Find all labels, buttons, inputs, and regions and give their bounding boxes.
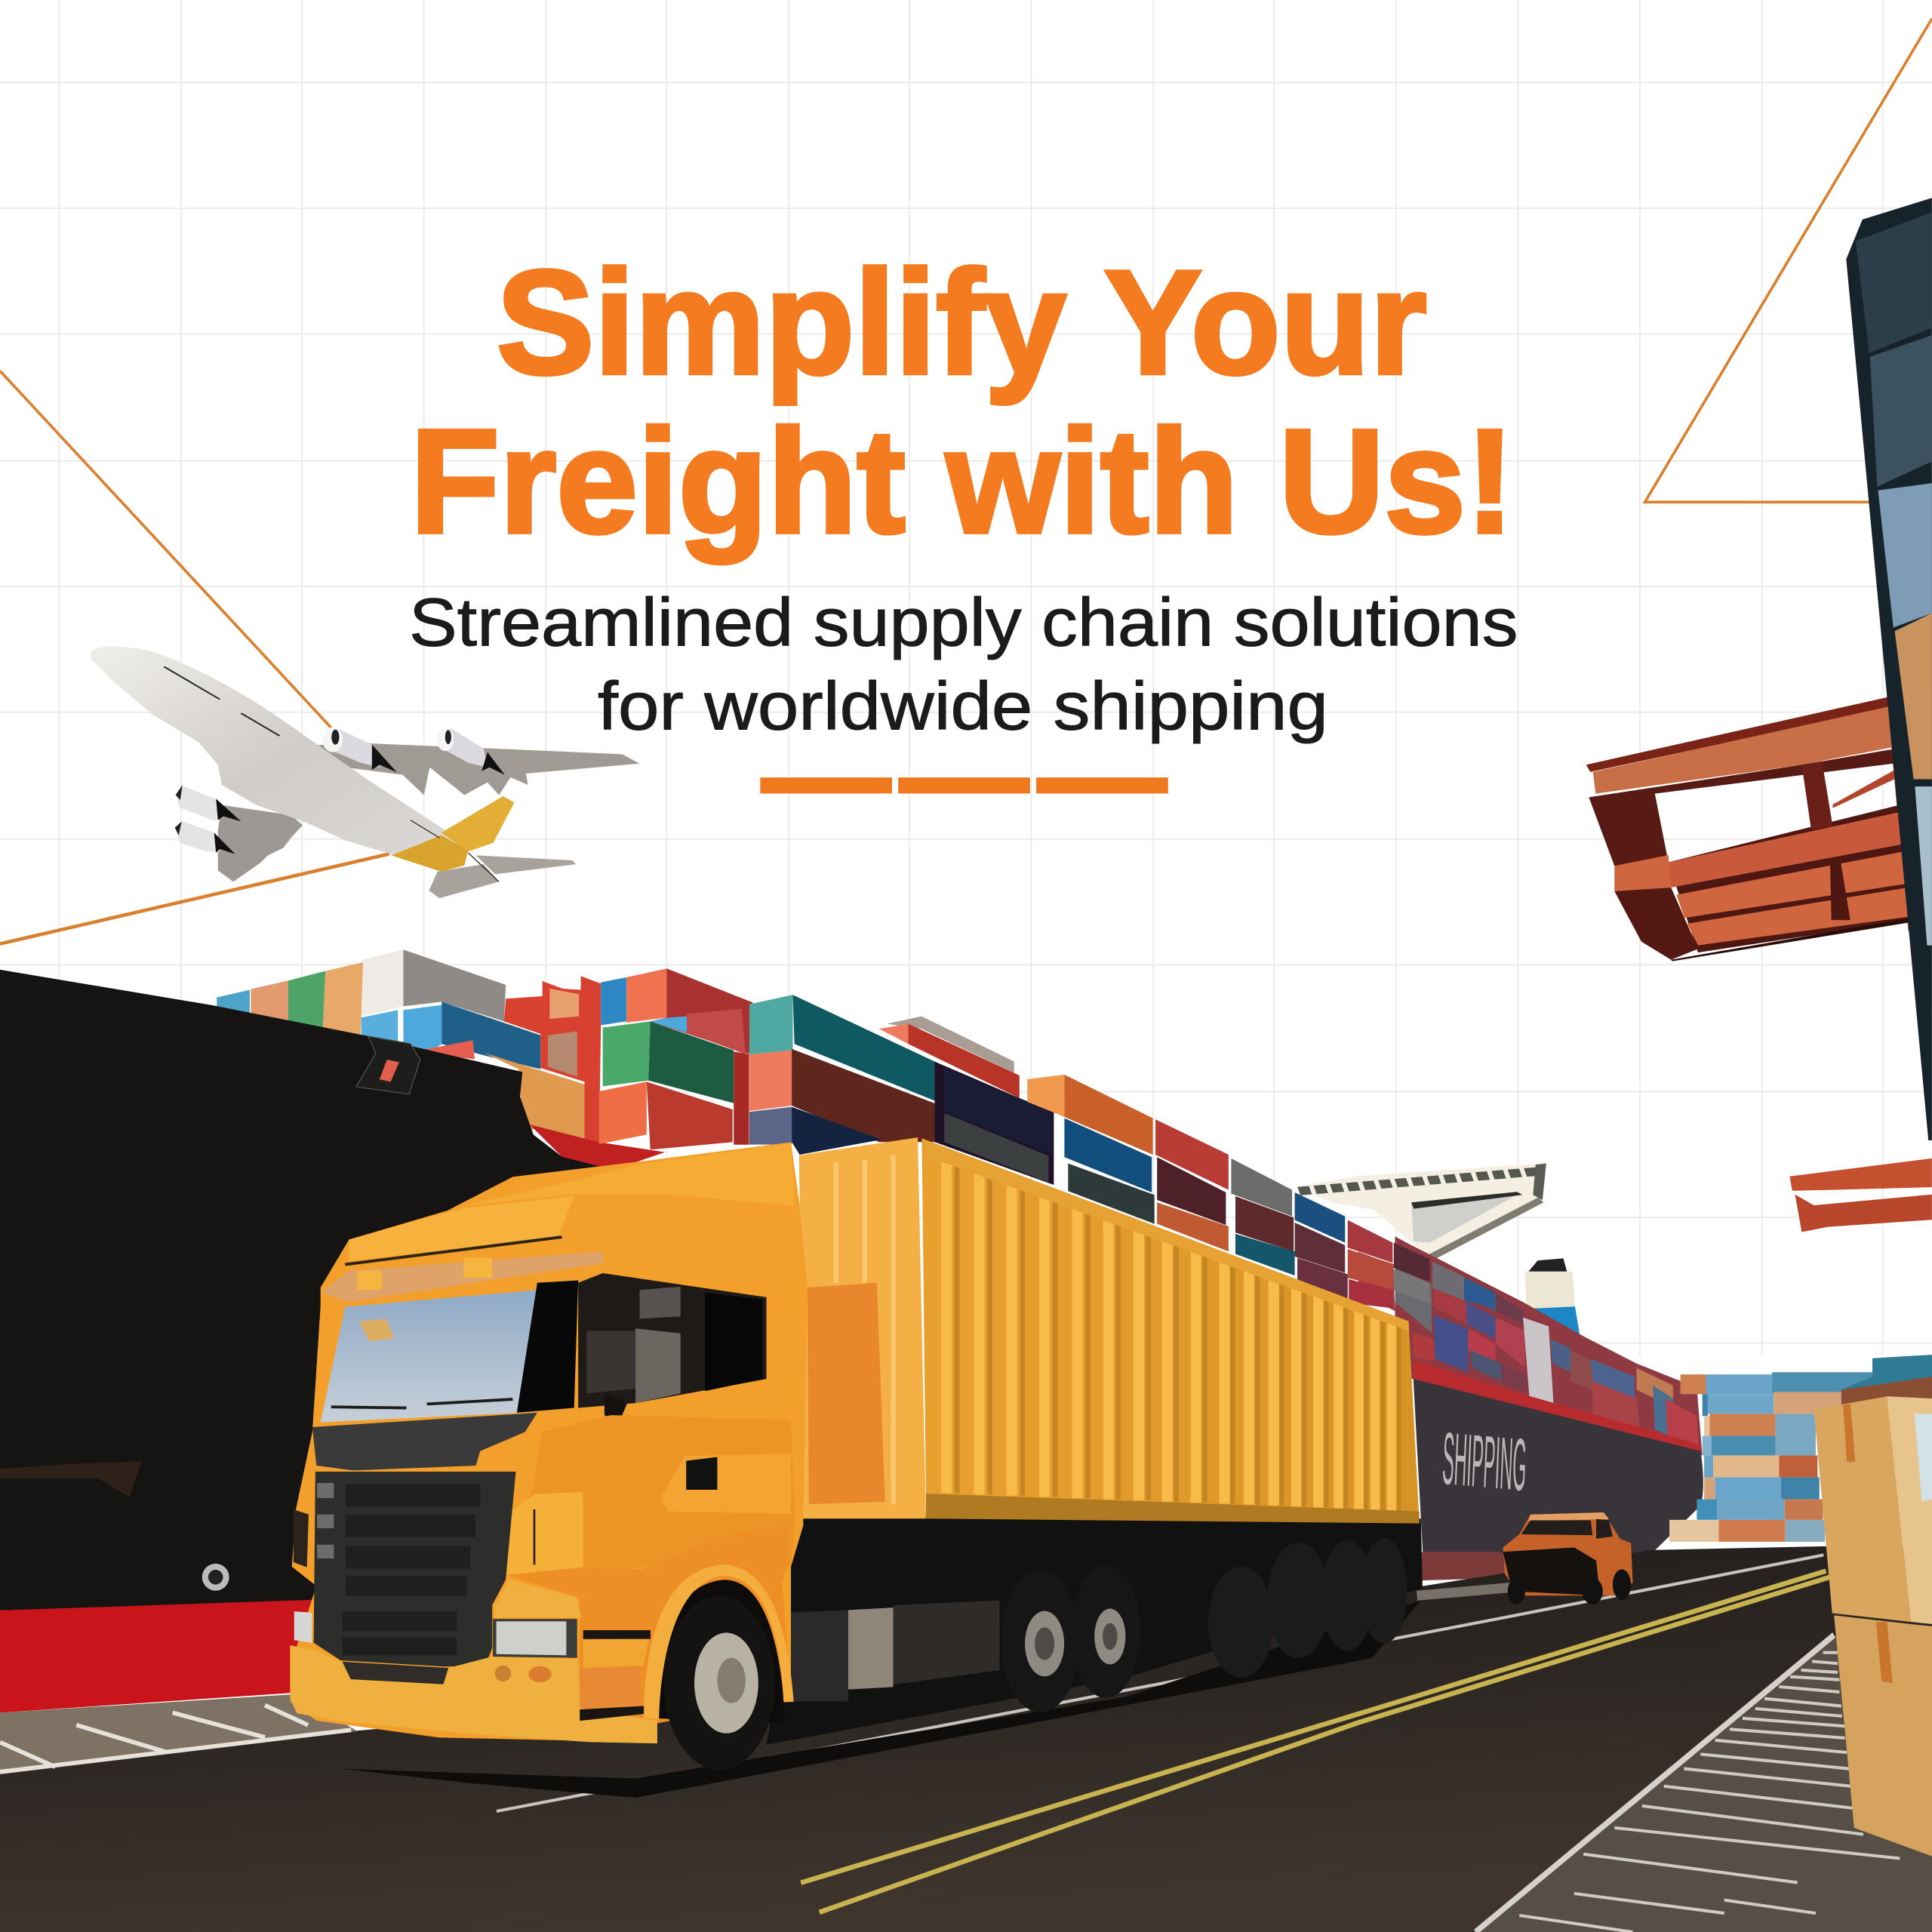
- subtitle: for worldwide shipping: [598, 669, 1328, 745]
- red waterline: [0, 1599, 327, 1712]
- door window: [517, 1273, 766, 1413]
- headline: [411, 240, 1515, 564]
- side mirror: [605, 1287, 681, 1423]
- rear drive wheels: [1001, 1565, 1140, 1712]
- dock crane tower panel: [1586, 198, 1932, 1232]
- tower image panels: [1856, 212, 1932, 946]
- corner panel: [506, 1492, 583, 1575]
- main truck with container trailer: [291, 1137, 1423, 1798]
- sun visor band and marker lights: [321, 1251, 603, 1302]
- radiator grille: [314, 1472, 515, 1666]
- black upper front panel: [312, 1413, 537, 1470]
- left quay with stripes: [0, 1694, 357, 1774]
- text: SHIPPING: [1441, 1417, 1528, 1506]
- door panel shading: [509, 1415, 795, 1577]
- truck front end: [290, 1472, 794, 1770]
- stacked cardboard boxes: [1814, 1396, 1932, 1857]
- chassis and road shadow: [341, 1514, 1423, 1798]
- stern of the ship: funnel, containers and dark hull: [1358, 1236, 1703, 1583]
- wipers: [331, 1399, 512, 1408]
- hull vent emblem: [202, 1564, 229, 1591]
- large black ship hull: [0, 970, 606, 1712]
- orange segmented divider: [760, 777, 1168, 793]
- front wheel: [664, 1596, 775, 1770]
- right loading dock with stripes: [1475, 1635, 1932, 1932]
- trailer wheels: [1208, 1538, 1407, 1678]
- subtitle: [409, 586, 1518, 745]
- container stacks: bow section: [217, 949, 752, 1170]
- decorative orange lines behind the airplane: [0, 371, 389, 944]
- hull camera fixture: [356, 1036, 420, 1094]
- cab body: [291, 1143, 808, 1743]
- far container yard: [1669, 1355, 1932, 1542]
- ship bridge superstructure: [1295, 1164, 1546, 1259]
- small orange pickup truck: [1503, 1512, 1633, 1604]
- lower cab orange panels: [506, 1526, 792, 1723]
- windshield: [321, 1290, 537, 1423]
- upper crane girders: [1586, 696, 1911, 961]
- front wheel well: [652, 1580, 786, 1723]
- lower crane arm: [1789, 1158, 1932, 1232]
- front wheel arch: [644, 1564, 794, 1719]
- orange triangle outline: [1645, 18, 1932, 502]
- headlights: [294, 1611, 577, 1658]
- lower box: [1834, 1615, 1932, 1857]
- subtitle: Streamlined supply chain solutions: [409, 586, 1518, 661]
- roof deflector: [463, 1143, 795, 1206]
- road surface: [0, 1546, 1932, 1932]
- headline: Freight with Us!: [411, 398, 1515, 564]
- cab side step panel: [580, 1630, 651, 1721]
- upper box: [1814, 1396, 1932, 1624]
- hull rust mark: [0, 1461, 142, 1497]
- container stacks: midship section: [749, 995, 1494, 1308]
- bumper: [290, 1580, 657, 1743]
- cab interior mirror: [359, 1319, 394, 1342]
- container side face: [921, 1138, 1420, 1524]
- side vent: [294, 1509, 309, 1567]
- tower dark frame: [1846, 198, 1932, 1140]
- road markings: [497, 1555, 1829, 1912]
- headline: Simplify Your: [497, 240, 1427, 405]
- container end face: [799, 1137, 926, 1518]
- airplane: [91, 646, 639, 898]
- fuel tank and step panels: [791, 1601, 999, 1702]
